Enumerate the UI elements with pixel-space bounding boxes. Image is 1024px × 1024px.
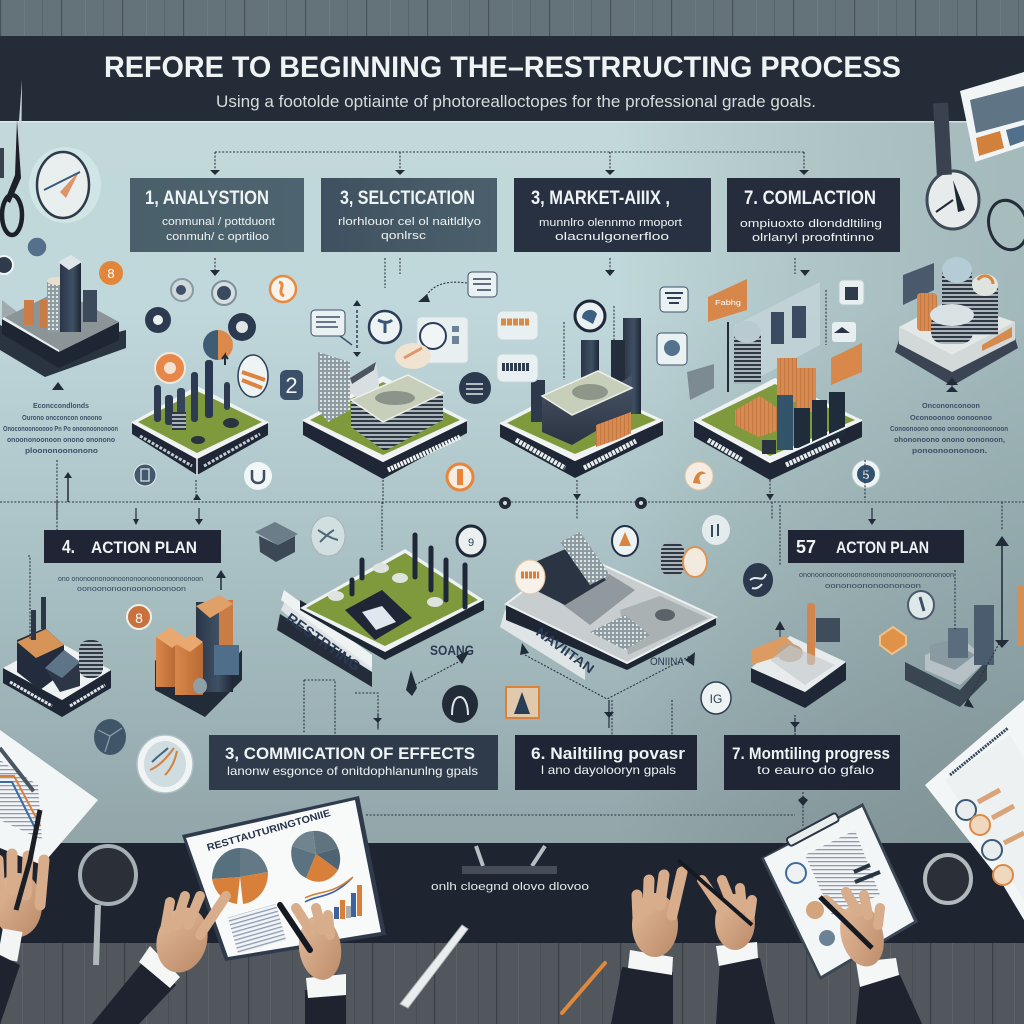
icon: compass clock left <box>29 147 101 223</box>
step box: compilation: ompiuoxto dlonddltiling <box>740 218 882 230</box>
document: pie chart report: RESTTAUTURINGTONIIE <box>206 808 332 854</box>
step box: communication of effects: lanonw esgonce of onitdophlanunlng gpals <box>227 764 478 778</box>
top wood strip <box>0 0 1024 37</box>
step box: compilation: 7. COMLACTION <box>744 188 876 209</box>
step box: monitoring progress 7: to eauro do gfalo <box>757 763 874 777</box>
left paragraph: ploononoononono <box>25 446 98 455</box>
subtitle: Using a footolde optiainte of photorealloctopes for the professional grade goals. <box>216 92 816 111</box>
icon: magnifier <box>80 846 136 965</box>
chart: small pie <box>291 831 340 882</box>
title banner <box>0 36 1024 122</box>
illustration: orange towers <box>155 595 242 717</box>
connectors lower <box>304 680 808 826</box>
right paragraph: ponoonoononoon. <box>912 446 987 455</box>
action plan description right: oononoononoononoon <box>825 583 921 590</box>
icons: analysis bubbles <box>145 279 268 397</box>
icon: orange pencil <box>562 963 605 1013</box>
step box: monitoring progress 6 <box>515 735 697 790</box>
step box: action plan right <box>788 530 964 563</box>
icons: market callouts <box>497 287 688 382</box>
icons: platform callouts: 9 <box>468 537 474 549</box>
title: REFORE TO BEGINNING THE–RESTRRUCTING PROCESS <box>104 51 901 84</box>
step box: market mix: munnlro olennmo rmoport <box>539 217 682 229</box>
icon: small coin left <box>0 237 47 274</box>
step box: selection: 3, SELCTICATION <box>340 188 475 209</box>
step box: selection: rlorhlouor cel ol naitldlyo <box>338 216 481 228</box>
illustration: compilation platform <box>694 282 862 480</box>
step box: action plan left: ACTION PLAN <box>91 538 197 557</box>
bottom wood strip <box>0 943 1024 1024</box>
step box: compilation <box>727 178 900 252</box>
illustration: stacked device platform right <box>780 505 1009 708</box>
chart: bars and trend <box>305 877 362 919</box>
icon: right clock <box>927 171 979 229</box>
hand: holding pen on report <box>280 905 346 1024</box>
icon: left world ball <box>94 719 126 755</box>
icon: orange cube <box>880 627 906 654</box>
illustration: selection platform <box>303 352 467 479</box>
illustration: navigation grey platform <box>500 532 716 699</box>
step box: monitoring progress 7 <box>724 735 900 790</box>
right paragraph: ohononoono onono oononoon, <box>894 435 1005 444</box>
action plan description left: ono ononoononoonoononoonoononoonoonoon <box>58 576 203 583</box>
step box: action plan right: ACTON PLAN <box>836 538 929 557</box>
middle connector lines <box>0 460 1024 550</box>
step box: compilation: olrlanyl proofntinno <box>752 232 874 244</box>
step box: communication of effects <box>209 735 498 790</box>
step box: action plan left <box>44 530 221 563</box>
illustration: coins platform right <box>895 257 1018 392</box>
step box: selection <box>321 178 497 252</box>
illustration: navigation grey platform: ONIINA <box>650 656 685 668</box>
step box: monitoring progress 6: l ano dayolooryn gpals <box>541 763 676 777</box>
step box: action plan right: 57 <box>796 537 816 557</box>
action plan description right: ononoonoonoonoononoononoonoonoonononoon <box>799 572 954 579</box>
hand: centre left <box>611 872 682 1024</box>
action plan description left <box>58 576 203 593</box>
icon: strap <box>933 103 952 175</box>
illustration: analysis platform <box>132 360 268 475</box>
illustration: market platform <box>500 318 663 478</box>
right edge orange tab <box>1018 586 1024 646</box>
chart: big pie <box>212 848 268 904</box>
illustration: small machine platform <box>751 603 846 708</box>
illustration: corporate platform left <box>0 255 126 390</box>
icon: orange badge 8 <box>99 261 123 285</box>
icons: lower badges: IG <box>710 692 722 706</box>
icon: ring right <box>925 855 971 903</box>
step box: analysis <box>130 178 304 252</box>
document top right <box>960 72 1024 162</box>
hand: right writing on clipboard <box>820 892 922 1024</box>
step box: market mix <box>514 178 711 252</box>
icon: orange ring badge <box>270 276 296 302</box>
action plan description left: oonoononoonoononoonoon <box>77 586 186 593</box>
icon: orange swirl badge <box>685 462 713 490</box>
step box: action plan left: 4. <box>62 537 75 557</box>
icon: orange number 8 <box>127 605 151 629</box>
step box: market mix: 3, MARKET-AIIIX , <box>531 188 670 209</box>
icons: lower badges <box>442 682 731 723</box>
illustration: navigation grey platform: NAVIITAN <box>533 624 597 676</box>
hand: far left with scissors <box>0 810 44 1024</box>
icon: ruler <box>400 925 468 1008</box>
step box: selection: qonlrsc <box>381 230 427 242</box>
right paragraph <box>890 401 1008 455</box>
right paragraph: Oconooonoo oonoonoo <box>910 413 992 422</box>
hand: centre right with pen <box>678 860 775 1024</box>
left paragraph: Ourono oncconcon onoono <box>22 413 102 422</box>
action plan description right <box>799 572 954 590</box>
illustration: restructuring green platform: RESTRTING <box>283 609 364 674</box>
document right corner <box>925 700 1024 920</box>
icon: desk clip and caption <box>431 846 589 893</box>
step box: monitoring progress 6: 6. Nailtiling povasr <box>531 744 685 763</box>
icon: orange badge 8: 8 <box>107 266 115 281</box>
step box: communication of effects: 3, COMMICATION OF EFFECTS <box>225 744 475 763</box>
icon: orange number 8: 8 <box>135 610 143 626</box>
icon: orange ring 2 <box>447 464 473 490</box>
icon: round seal <box>137 735 193 793</box>
icons: navigation callouts <box>515 515 730 594</box>
badge number 2: 2 <box>285 373 298 398</box>
hand: pointing on report <box>92 896 226 1024</box>
icon: blue ring badge: 5 <box>863 468 870 482</box>
icons: platform callouts <box>255 516 485 562</box>
icon: arrow up left <box>28 500 226 640</box>
document left corner <box>0 730 98 865</box>
icons: compilation callouts <box>687 279 864 400</box>
illustration: restructuring green platform: SOANG <box>430 642 474 658</box>
icon: magnifier ring right <box>983 196 1024 254</box>
top connector lines <box>210 152 810 288</box>
icon: scissors <box>0 80 22 235</box>
document: pie chart report <box>182 796 386 961</box>
badge number 2 <box>280 370 303 400</box>
step box: analysis: 1, ANALYSTION <box>145 188 269 209</box>
left paragraph <box>3 401 118 455</box>
icon: dark speech leaf <box>743 563 773 597</box>
illustration: stack platform lower left <box>3 597 111 717</box>
left paragraph: Econccondlonds <box>33 401 89 410</box>
icon: blue ring badge <box>852 460 880 488</box>
step box: monitoring progress 7: 7. Momtiling progress <box>732 744 890 763</box>
icons: selection callouts <box>311 272 497 404</box>
right paragraph: Oncononconoon <box>922 401 980 410</box>
left paragraph: onoononoonoon onono ononono <box>7 435 115 444</box>
illustration: restructuring green platform <box>277 535 484 735</box>
icon: desk clip and caption: onlh cloegnd olovo dlovoo <box>431 881 589 893</box>
step box: analysis: conmunal / pottduont <box>162 216 275 228</box>
step box: market mix: olacnulgonerfloo <box>555 231 669 243</box>
step box: analysis: conmuh/ c oprtiloo <box>166 231 269 243</box>
document: clipboard <box>761 803 918 980</box>
small badges row analysis <box>134 462 272 490</box>
bottom dark band <box>0 843 1024 943</box>
left paragraph: Onoconoonooooo Pn Po onoonoononoon <box>3 424 118 433</box>
icons: compilation callouts: Fabhg <box>715 300 741 307</box>
